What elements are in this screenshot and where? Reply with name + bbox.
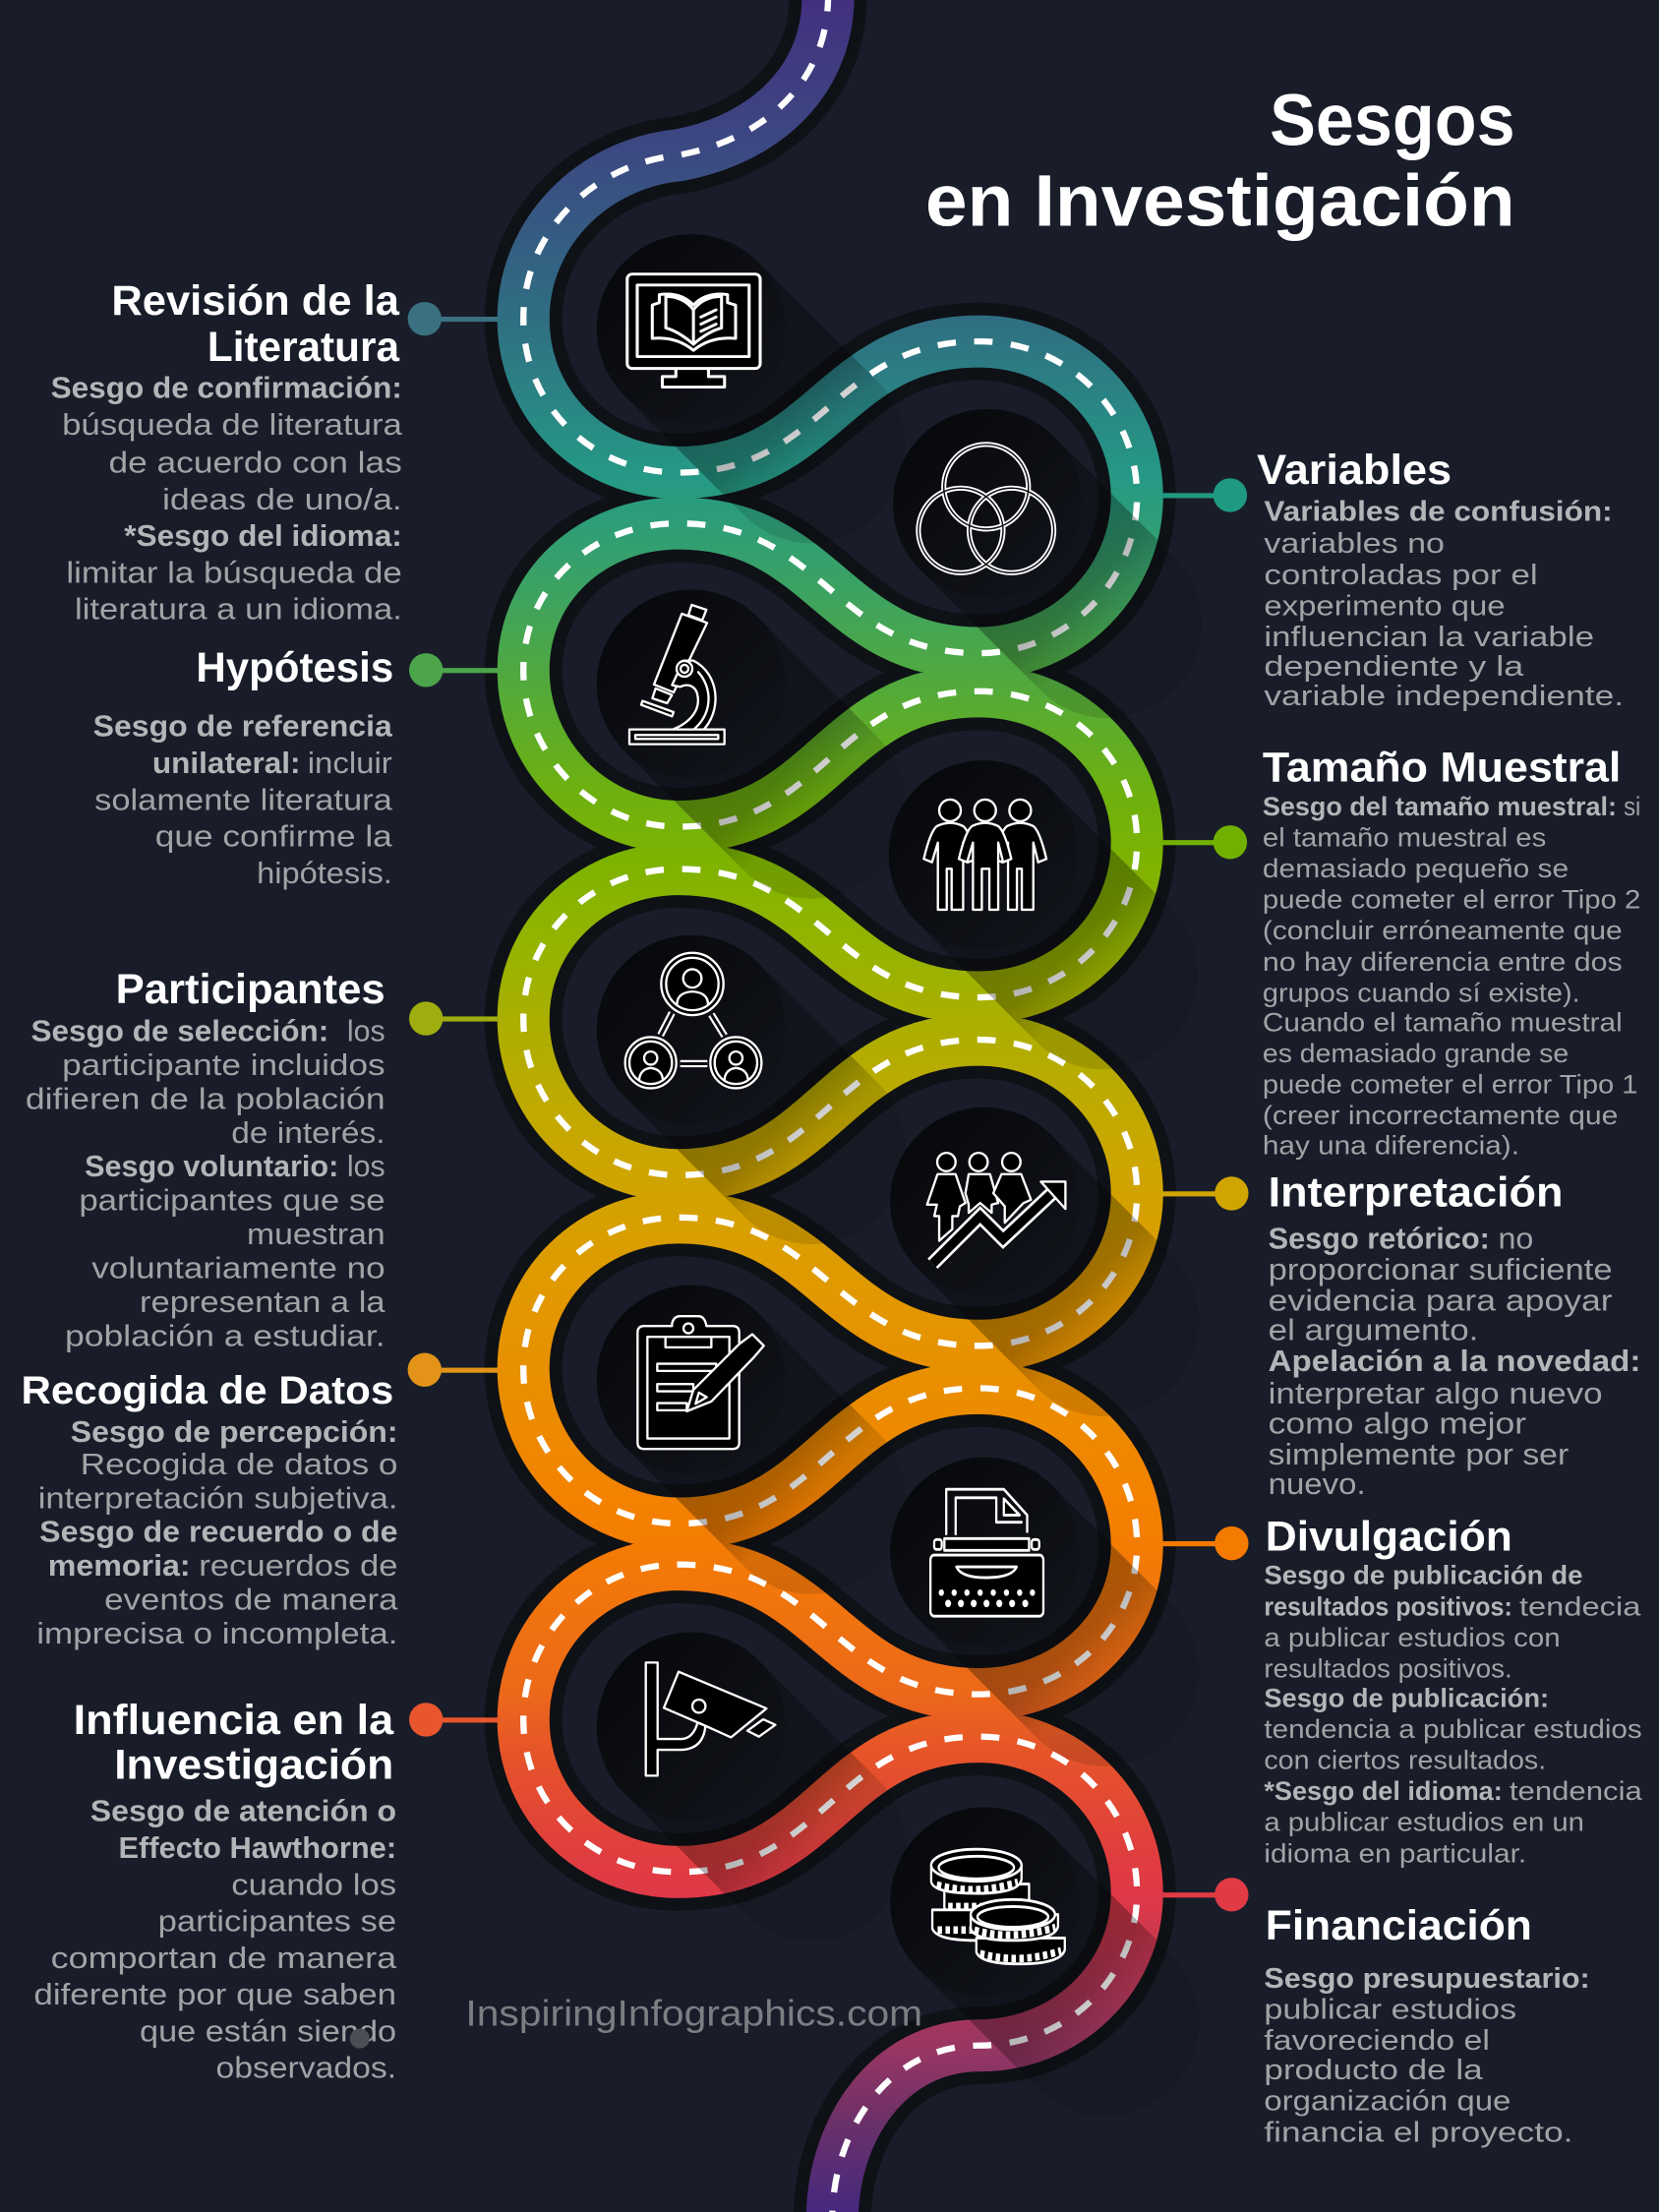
text block: Influencia en la Investigación: Effecto Hawthorne: [118,1832,396,1865]
text block: Financiación [1264,1902,1590,2148]
text block: Divulgación [1264,1513,1642,1868]
text block: Revisión de la Literatura: búsqueda de literatura [62,409,402,442]
text block: Revisión de la Literatura: Literatura [207,324,400,371]
icon: network of people [625,953,761,1088]
watermark: InspiringInfographics.com [465,1993,922,2034]
text block: Variables [1257,447,1624,712]
text block: Divulgación: tendencia [1510,1776,1642,1806]
text block: Tamaño Muestral: puede cometer el error Tipo 1 [1263,1070,1637,1100]
text block: Revisión de la Literatura: de acuerdo con las [108,447,402,479]
text block: Interpretación: simplemente por ser [1269,1439,1569,1471]
text block: Participantes: población a estudiar. [65,1320,385,1352]
text block: Hypótesis: incluir [308,747,392,780]
text block: Divulgación: resultados positivos: [1264,1591,1512,1621]
connector: Influencia en la Investigación [409,1703,498,1737]
text block: Influencia en la Investigación: Investigación [114,1742,393,1789]
text block: Participantes: voluntariamente no [91,1252,385,1285]
title [925,79,1515,241]
text block: Tamaño Muestral [1263,745,1640,1160]
connector: Participantes [409,1001,498,1036]
title: en Investigación [925,158,1515,241]
text block: Tamaño Muestral: Cuando el tamaño muestral [1263,1007,1623,1037]
text block: Tamaño Muestral: es demasiado grande se [1263,1039,1569,1068]
icon: three people [923,800,1046,910]
title: Sesgos [1270,79,1515,161]
text block: Divulgación: Sesgo de publicación de [1264,1561,1583,1590]
connector: Tamaño Muestral [1162,825,1247,859]
text block: Variables: dependiente y la [1264,651,1523,683]
text block: Interpretación: no [1498,1223,1533,1255]
text block: Variables: Variables [1257,447,1452,494]
text block: Hypótesis: hipótesis. [257,858,392,890]
text block: Hypótesis: Hypótesis [196,644,393,691]
text block: Hypótesis [93,644,393,890]
text block: Interpretación [1269,1168,1640,1501]
text block: Participantes: los [347,1016,385,1048]
icon circles [597,234,1082,1997]
text block: Recogida de Datos: Sesgo de recuerdo o de [39,1517,398,1549]
text block: Financiación: producto de la [1264,2055,1483,2086]
text block: Interpretación: nuevo. [1269,1468,1366,1501]
text block: Divulgación: con ciertos resultados. [1264,1746,1546,1775]
text block: Variables: experimento que [1264,590,1506,622]
text block: Variables: influencian la variable [1264,622,1594,653]
text block: Divulgación: a publicar estudios con [1264,1623,1561,1652]
text block: Hypótesis: Sesgo de referencia [93,711,392,744]
text block: Revisión de la Literatura: limitar la búsqueda de [66,557,402,589]
text block: Interpretación: Interpretación [1269,1168,1563,1216]
text block: Financiación: organización que [1264,2086,1511,2118]
text block: Revisión de la Literatura: Sesgo de confirmación: [51,372,402,404]
text block: Recogida de Datos: interpretación subjetiva. [38,1482,398,1515]
text block: Participantes: participante incluidos [62,1049,385,1082]
text block: Influencia en la Investigación [33,1697,396,2085]
text block: Variables: controladas por el [1264,560,1538,591]
text block: Interpretación: Sesgo retórico: [1269,1223,1490,1255]
text block: Influencia en la Investigación: participantes se [158,1906,396,1939]
icon: typewriter [930,1489,1043,1616]
text block: Tamaño Muestral: puede cometer el error Tipo 2 [1263,885,1640,915]
text block: Interpretación: evidencia para apoyar [1269,1285,1613,1317]
text block: Variables: Variables de confusión: [1264,496,1613,527]
text block: Interpretación: interpretar algo nuevo [1269,1378,1603,1410]
text block: Divulgación: tendecia [1519,1591,1641,1621]
text block: Variables: variable independiente. [1264,681,1624,712]
connector: Interpretación [1162,1176,1249,1211]
text block: Tamaño Muestral: no hay diferencia entre dos [1263,947,1623,977]
text block: Divulgación: resultados positivos. [1264,1653,1512,1683]
text block: Interpretación: proporcionar suficiente [1269,1254,1613,1286]
text block: Influencia en la Investigación: comportan de manera [51,1943,396,1975]
text block: Divulgación: Divulgación [1266,1513,1512,1560]
text block: Participantes: Sesgo de selección: [31,1016,328,1048]
connector: Recogida de Datos [408,1353,498,1387]
text block: Recogida de Datos: Sesgo de percepción: [71,1416,398,1449]
text block: Participantes [26,966,385,1352]
icon: stacks of coins [931,1849,1065,1964]
text block: Tamaño Muestral: (creer incorrectamente que [1263,1101,1618,1130]
text block: Financiación: favoreciendo el [1264,2025,1490,2057]
text block: Tamaño Muestral: el tamaño muestral es [1263,823,1546,853]
text block: Influencia en la Investigación: Sesgo de atención o [90,1796,396,1828]
watermark dot [350,2029,370,2049]
text block: Revisión de la Literatura: *Sesgo del idioma: [124,520,402,553]
text block: Recogida de Datos [22,1368,398,1650]
text block: Participantes: difieren de la población [26,1083,385,1115]
text block: Recogida de Datos: Recogida de datos o [81,1449,398,1481]
text block: Tamaño Muestral: Sesgo del tamaño muestral: [1263,792,1617,821]
text block: Variables: variables no [1264,528,1445,560]
connector: Variables [1162,478,1247,512]
connector: Hypótesis [409,653,498,688]
text block: Tamaño Muestral: demasiado pequeño se [1263,854,1569,883]
text block: Recogida de Datos: eventos de manera [104,1584,398,1617]
text block: Financiación: Sesgo presupuestario: [1264,1963,1590,1995]
text block: Recogida de Datos: imprecisa o incompleta. [36,1618,398,1650]
icon: surveillance camera [646,1662,775,1775]
text block: Participantes: Participantes [116,966,385,1013]
winding road [523,0,1137,2212]
text block: Tamaño Muestral: si [1624,792,1640,821]
icon: monitor with book [627,274,760,388]
text block: Interpretación: el argumento. [1269,1315,1478,1347]
text block: Participantes: los [347,1151,385,1183]
text block: Recogida de Datos: recuerdos de [199,1550,398,1583]
text block: Participantes: de interés. [231,1117,385,1150]
text block: Participantes: muestran [247,1219,385,1251]
connector: Financiación [1162,1878,1249,1911]
text block: Divulgación: Sesgo de publicación: [1264,1684,1549,1713]
text block: Tamaño Muestral: (concluir erróneamente que [1263,916,1623,945]
text block: Influencia en la Investigación: diferente por que saben [33,1979,396,2011]
text block: Financiación: financia el proyecto. [1264,2117,1572,2148]
text block: Divulgación: a publicar estudios en un [1264,1808,1584,1837]
text block: Recogida de Datos: memoria: [48,1550,191,1583]
text block: Divulgación: *Sesgo del idioma: [1264,1776,1503,1806]
text block: Financiación: publicar estudios [1264,1995,1516,2025]
text block: Influencia en la Investigación: observados. [215,2053,396,2085]
text block: Participantes: representan a la [140,1286,385,1319]
text block: Hypótesis: solamente literatura [94,784,392,816]
text block: Influencia en la Investigación: que están siendo [140,2015,396,2048]
text block: Interpretación: como algo mejor [1269,1407,1526,1440]
connector: Revisión de la Literatura [408,302,498,335]
connector: Divulgación [1162,1526,1249,1560]
text block: Interpretación: Apelación a la novedad: [1269,1345,1640,1378]
text block: Influencia en la Investigación: cuando los [231,1869,396,1901]
text block: Influencia en la Investigación: Influencia en la [74,1697,394,1744]
text block: Revisión de la Literatura: ideas de uno/a. [162,484,402,516]
text block: Participantes: participantes que se [79,1185,385,1218]
text block: Divulgación: tendencia a publicar estudios [1264,1714,1642,1744]
text block: Tamaño Muestral: Tamaño Muestral [1263,745,1621,792]
text block: Tamaño Muestral: hay una diferencia). [1263,1130,1519,1160]
text block: Recogida de Datos: Recogida de Datos [22,1368,393,1412]
text block: Hypótesis: unilateral: [152,747,301,780]
text block: Revisión de la Literatura [51,277,402,627]
text block: Hypótesis: que confirme la [155,821,392,854]
text block: Tamaño Muestral: grupos cuando sí existe). [1263,978,1580,1007]
text block: Revisión de la Literatura: Revisión de la [111,277,400,325]
text block: Financiación: Financiación [1266,1902,1532,1949]
text block: Revisión de la Literatura: literatura a un idioma. [75,594,402,627]
long shadows of icon circles [691,329,1107,2021]
icon: clipboard and pen [637,1316,764,1449]
icon: microscope [629,605,725,745]
icon: people with rising arrow [927,1153,1065,1264]
text block: Divulgación: idioma en particular. [1264,1838,1526,1868]
icon: three overlapping rings [918,445,1054,572]
text block: Participantes: Sesgo voluntario: [85,1151,338,1183]
